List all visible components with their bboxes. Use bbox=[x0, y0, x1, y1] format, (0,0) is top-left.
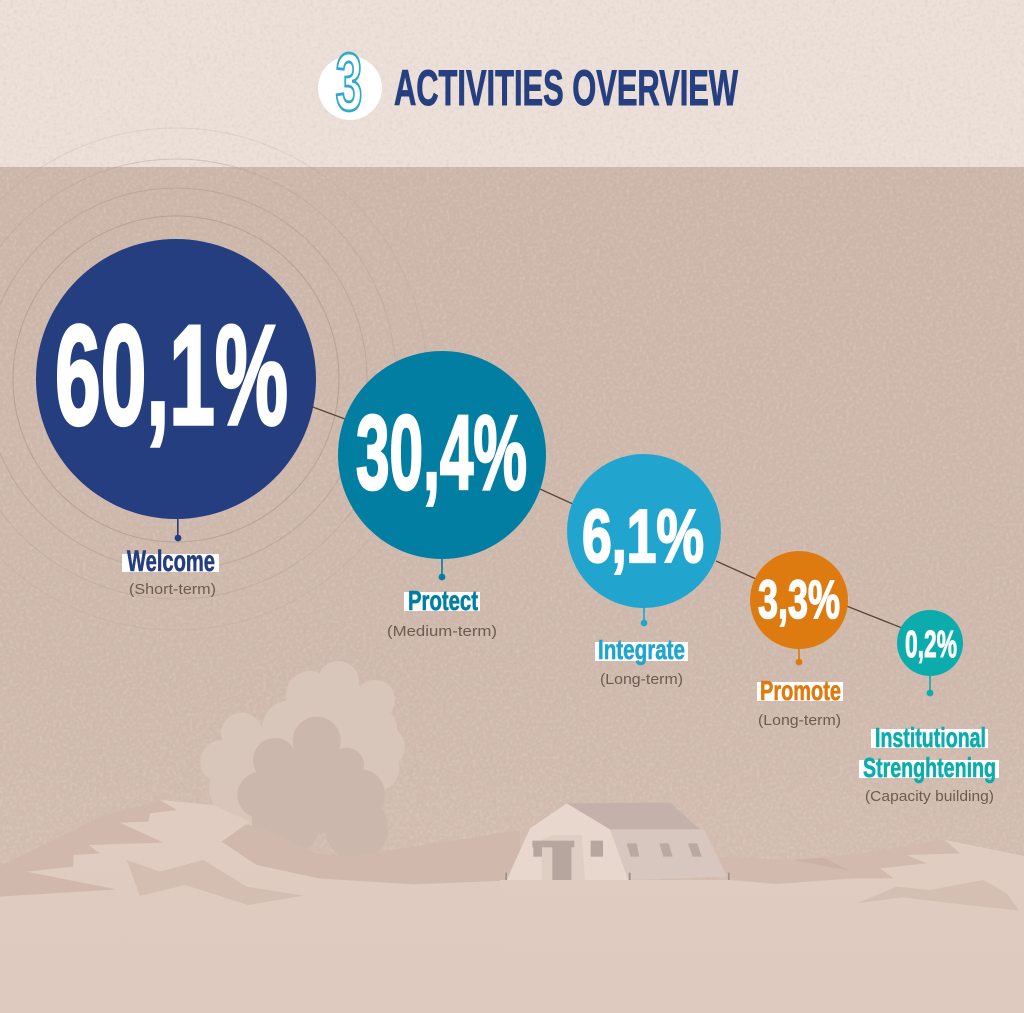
illustration: right mountains bbox=[713, 839, 960, 884]
pointer bbox=[439, 558, 445, 580]
sublabel: (Capacity building) bbox=[865, 789, 994, 805]
circle: 60,1% bbox=[36, 239, 316, 519]
circle: 6,1%: 6,1% bbox=[582, 494, 704, 578]
label: Welcome: Welcome bbox=[127, 545, 215, 578]
label: Welcome bbox=[122, 545, 219, 578]
illustration: left mountains bbox=[0, 801, 520, 897]
label: Promote: Promote bbox=[760, 675, 841, 706]
pointer bbox=[641, 607, 647, 626]
item: Integrate bbox=[567, 454, 721, 688]
item: Institutional Strengthening bbox=[859, 610, 999, 805]
circle: 0,2%: 0,2% bbox=[905, 624, 957, 666]
item: Promote bbox=[750, 551, 848, 729]
circle: 0,2% bbox=[897, 610, 963, 676]
concentric rings around main circle bbox=[0, 128, 427, 630]
icon: number 3 badge: 3 bbox=[336, 37, 362, 128]
label: Integrate: Integrate bbox=[598, 634, 685, 665]
circle: 30,4% bbox=[338, 351, 546, 559]
sublabel: (Long-term) bbox=[600, 672, 683, 688]
label: Protect: Protect bbox=[408, 585, 478, 616]
illustration: tent bbox=[505, 803, 730, 880]
illustration: ground right bbox=[500, 840, 1024, 1013]
circle: 30,4%: 30,4% bbox=[356, 394, 527, 512]
circle: 3,3%: 3,3% bbox=[758, 570, 840, 630]
illustration: light smoke cloud bbox=[200, 661, 405, 840]
illustration: ground left bbox=[0, 800, 520, 1013]
connector lines between circles bbox=[310, 406, 902, 628]
label: Institutional Strenghtening bbox=[859, 722, 999, 783]
sublabel: (Long-term) bbox=[758, 713, 841, 729]
sublabel: (Medium-term) bbox=[387, 624, 497, 640]
pointer bbox=[175, 518, 181, 541]
title text: ACTIVITIES OVERVIEW bbox=[394, 60, 738, 116]
circle: 60,1%: 60,1% bbox=[55, 296, 288, 455]
illustration: dark smoke cloud bbox=[237, 717, 388, 860]
background: header band bbox=[0, 0, 1024, 167]
sublabel: (Short-term) bbox=[129, 582, 216, 598]
item: Protect bbox=[338, 351, 546, 640]
pointer bbox=[927, 675, 933, 696]
circle: 3,3% bbox=[750, 551, 848, 649]
item: Welcome bbox=[36, 239, 316, 598]
circle: 6,1% bbox=[567, 454, 721, 608]
title group bbox=[318, 37, 738, 128]
pointer bbox=[796, 648, 802, 665]
